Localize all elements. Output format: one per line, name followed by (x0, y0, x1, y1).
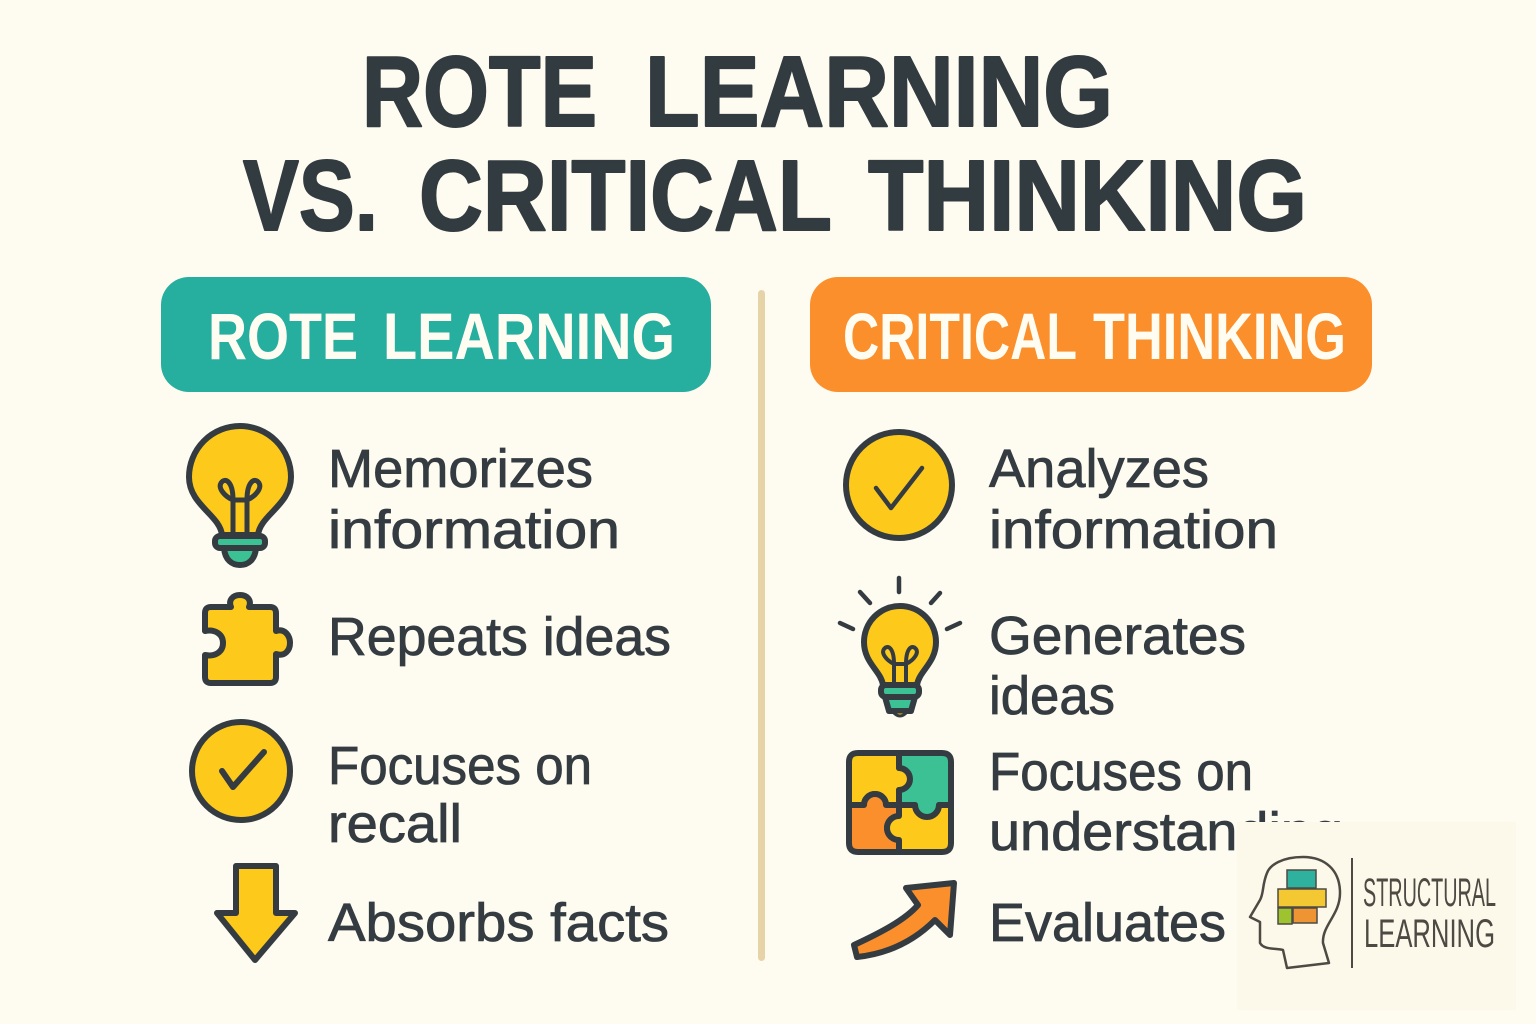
text: focuses on recall: Focuses on (328, 736, 592, 796)
icon: light bulb (189, 426, 291, 565)
text: memorizes information: information (328, 500, 620, 560)
title: ROTE (362, 36, 597, 148)
text: repeats ideas: Repeats ideas (328, 607, 671, 667)
title (243, 36, 1307, 252)
panel: critical thinking (810, 277, 1372, 957)
heading: rote learning: LEARNING (383, 299, 675, 373)
icon: puzzle piece (205, 595, 290, 683)
icon: down arrow (217, 866, 295, 960)
icon: up right arrow (854, 883, 954, 957)
text: generates ideas: ideas (989, 666, 1115, 726)
text: memorizes information: Memorizes (328, 439, 593, 499)
heading: rote learning (161, 277, 711, 392)
title: THINKING (868, 140, 1307, 252)
icon: check circle (192, 722, 290, 820)
icon: light bulb with rays (840, 578, 960, 716)
text: memorizes information (328, 439, 620, 560)
logo: structural learning (1237, 822, 1516, 1010)
title: LEARNING (645, 36, 1113, 148)
icon: four piece puzzle (849, 753, 951, 852)
text: focuses on understanding: understanding (989, 802, 1343, 862)
text: analyzes information (989, 439, 1278, 560)
text: focuses on recall: recall (328, 794, 462, 854)
text: focuses on understanding (989, 742, 1343, 862)
icon: head with blocks (1250, 857, 1340, 968)
text: generates ideas: Generates (989, 606, 1246, 666)
logo wordmark (1363, 871, 1496, 956)
text: focuses on understanding: Focuses on (989, 742, 1253, 802)
heading: critical thinking: CRITICAL (843, 299, 1077, 373)
text: generates ideas (989, 606, 1246, 726)
text: absorbs facts: Absorbs facts (328, 893, 669, 953)
icon: check circle (846, 432, 952, 538)
text: evaluates: Evaluates (989, 893, 1226, 953)
text: analyzes information: Analyzes (989, 439, 1209, 499)
heading: critical thinking: THINKING (1093, 299, 1346, 373)
title: VS. (243, 140, 378, 252)
text: focuses on recall (328, 736, 592, 854)
text: analyzes information: information (989, 500, 1278, 560)
panel: rote learning (161, 277, 711, 960)
title: CRITICAL (419, 140, 832, 252)
heading: rote learning: ROTE (208, 299, 358, 373)
heading: critical thinking (810, 277, 1372, 392)
